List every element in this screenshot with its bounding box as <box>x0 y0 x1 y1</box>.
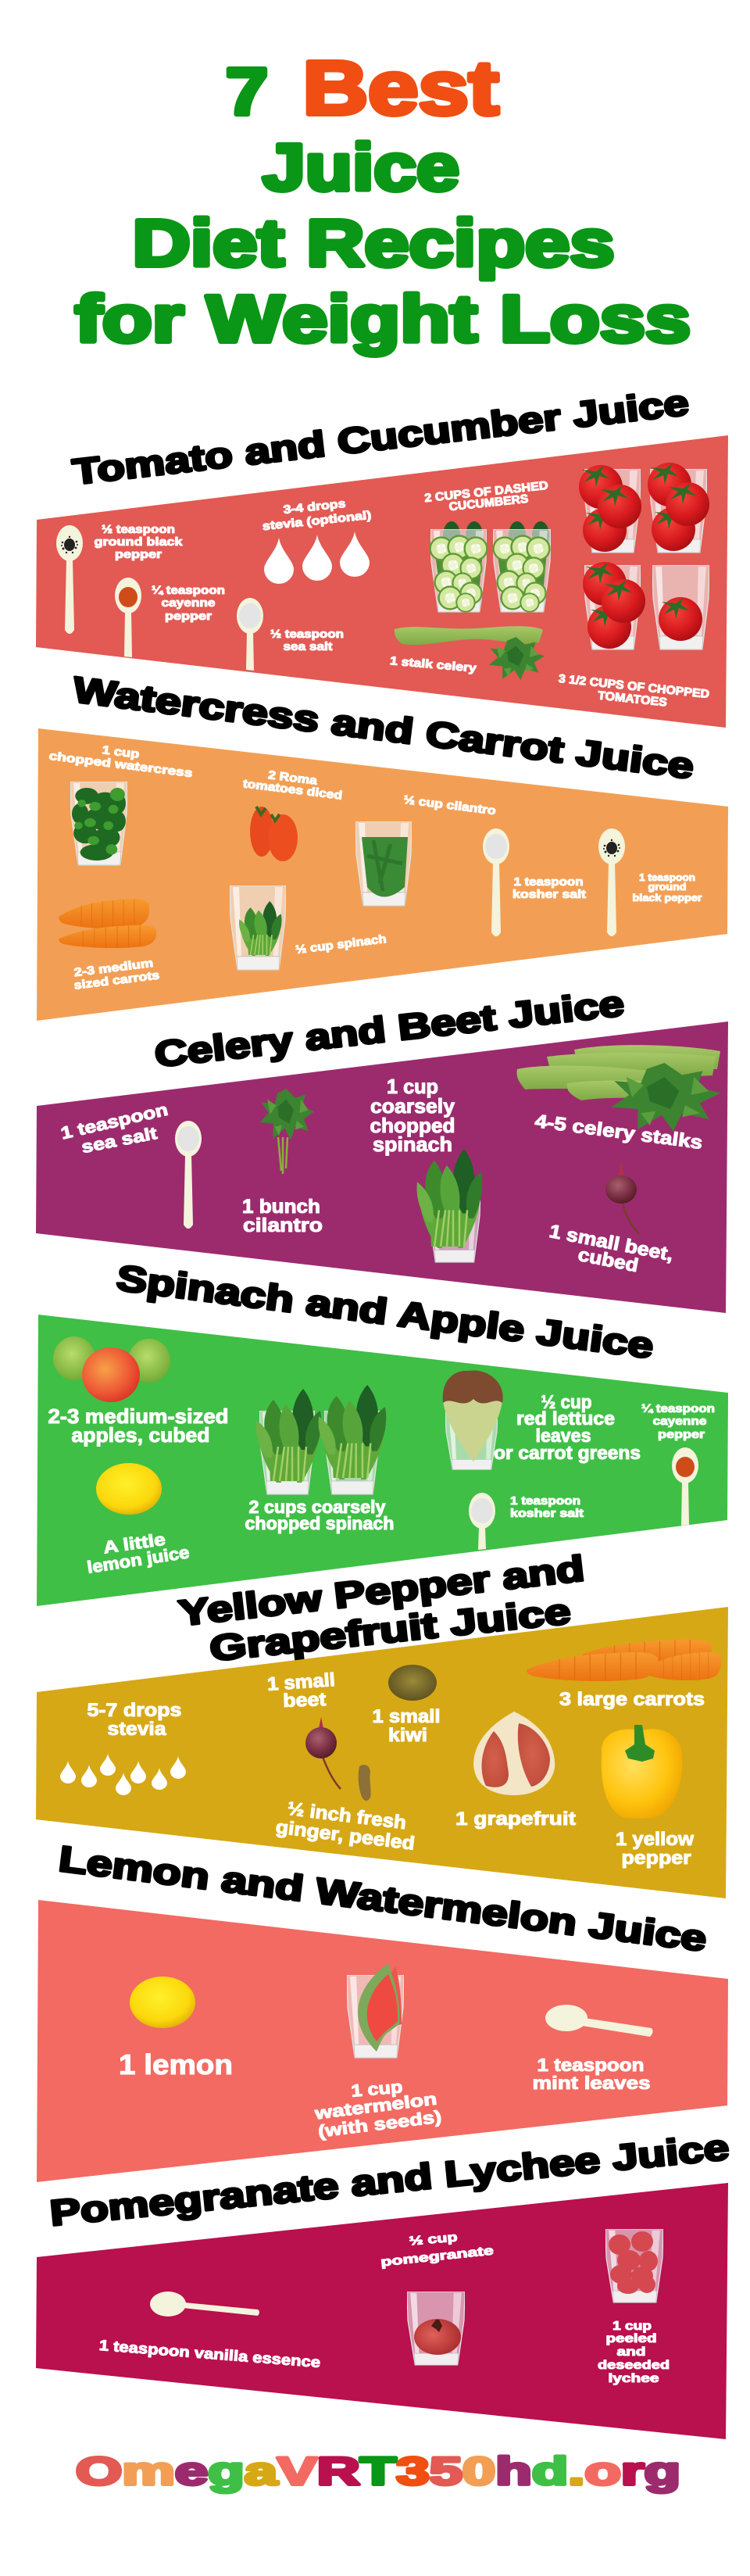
label: deseeded <box>598 2359 670 2372</box>
label: 2 cups coarsely <box>248 1497 386 1517</box>
panel: watercress and carrot juice <box>37 728 728 1021</box>
label: 2 CUPS OF DASHED <box>424 479 549 505</box>
label <box>633 871 702 903</box>
label <box>533 2055 650 2093</box>
title: Diet Recipes <box>133 206 614 280</box>
label: 1 teaspoon <box>538 2055 644 2075</box>
label: cilantro <box>243 1215 323 1236</box>
icon: stevia drops <box>60 1754 186 1795</box>
label: kosher salt <box>510 1507 584 1520</box>
icon: pomegranate glass <box>407 2292 465 2365</box>
label: ground black <box>94 535 183 549</box>
icon: black pepper spoon <box>56 525 83 634</box>
label: stevia <box>108 1719 166 1740</box>
heading: watercress and carrot: Watercress and Carrot Juice <box>71 669 696 786</box>
label: black pepper <box>633 892 702 903</box>
icon: beet <box>305 1717 341 1789</box>
label: CUCUMBERS <box>448 492 529 513</box>
label: ground <box>648 881 687 893</box>
icon: celery stalks <box>516 1045 720 1131</box>
label: pepper <box>622 1848 691 1869</box>
heading: pomegranate and lychee: Pomegranate and Lychee Juice <box>48 2127 730 2234</box>
label <box>270 628 344 653</box>
label <box>94 523 183 561</box>
panel: celery and beet juice <box>36 1021 728 1313</box>
label: 2-3 medium-sized <box>48 1404 228 1428</box>
label: 3 large carrots <box>559 1689 705 1710</box>
label: sized carrots <box>73 968 160 993</box>
icon: lemon <box>96 1463 162 1515</box>
title: Best <box>303 45 498 131</box>
icon: cayenne spoon <box>115 578 141 657</box>
label: 1 teaspoon <box>510 1494 580 1508</box>
icon: sea salt spoon <box>237 598 263 671</box>
label <box>424 479 549 513</box>
label: spinach <box>373 1132 452 1156</box>
icon: lemon <box>130 1977 195 2028</box>
label: ½ cup spinach <box>295 932 388 957</box>
panel: pomegranate and lychee juice <box>36 2183 728 2439</box>
icon: spinach glass <box>417 1149 482 1262</box>
icon: beet <box>605 1161 639 1234</box>
label: sea salt <box>80 1123 159 1157</box>
label: leaves <box>536 1426 591 1447</box>
panel: tomato and cucumber juice <box>36 435 728 728</box>
label <box>380 2231 495 2270</box>
title: Juice <box>262 131 459 204</box>
label: pomegranate <box>380 2244 495 2270</box>
label: kosher salt <box>512 888 586 901</box>
icon: cilantro bunch <box>260 1089 314 1174</box>
label: ¼ teaspoon <box>152 584 225 597</box>
icon: lychee glass <box>605 2229 663 2302</box>
label <box>152 584 225 623</box>
icon: teaspoon <box>545 2005 653 2037</box>
label: ½ cup <box>541 1392 592 1413</box>
label: cubed <box>577 1244 640 1276</box>
label: tomatoes diced <box>242 777 343 803</box>
label: red lettuce <box>516 1408 615 1429</box>
heading: yellow pepper and grapefruit: Grapefruit Juice <box>208 1590 573 1669</box>
label: 1 teaspoon <box>59 1100 170 1143</box>
icon: black pepper spoon <box>598 828 625 936</box>
icon: stevia drops <box>264 531 370 584</box>
label <box>548 1221 675 1276</box>
label: pepper <box>165 610 212 623</box>
label: 4-5 celery stalks <box>534 1111 704 1154</box>
title <box>75 45 691 356</box>
label <box>48 1404 228 1447</box>
label: mint leaves <box>533 2073 650 2093</box>
label: lychee <box>608 2372 659 2385</box>
heading: lemon and watermelon: Lemon and Watermelon Juice <box>56 1838 709 1959</box>
label <box>266 1669 336 1712</box>
label: chopped <box>370 1114 455 1137</box>
label: 1 grapefruit <box>455 1809 576 1830</box>
icon: spinach glass <box>230 886 286 970</box>
label: TOMATOES <box>597 689 668 710</box>
icon: sea salt spoon <box>175 1121 202 1229</box>
label: chopped spinach <box>245 1513 394 1533</box>
label: 1 cup <box>387 1075 438 1098</box>
label: or carrot greens <box>494 1443 641 1464</box>
label <box>59 1100 170 1157</box>
icon: spinach glasses <box>256 1385 386 1494</box>
icon: kiwi <box>388 1665 437 1701</box>
label <box>88 1700 181 1740</box>
label <box>512 875 586 901</box>
label <box>372 1706 441 1746</box>
icon: cayenne spoon <box>672 1447 698 1526</box>
label: 2 Roma <box>267 768 319 788</box>
label <box>274 1798 416 1855</box>
footer: website: O m e g a V R T 3 5 0 h d .o rg <box>76 2449 680 2493</box>
label: 1 yellow <box>616 1829 694 1850</box>
icon: cucumber glasses <box>430 521 551 612</box>
label: lemon juice <box>86 1542 191 1577</box>
label <box>245 1497 394 1533</box>
icon: grapefruit <box>473 1712 555 1795</box>
heading: spinach and apple: Spinach and Apple Juice <box>115 1257 656 1366</box>
label: 5-7 drops <box>88 1700 181 1721</box>
icon: kosher salt spoon <box>483 828 509 936</box>
label: 1 bunch <box>242 1196 320 1218</box>
icon: tomato glasses <box>579 463 709 649</box>
icon: watercress glass <box>70 782 127 865</box>
label: 1 lemon <box>119 2048 233 2080</box>
label: cayenne <box>653 1415 706 1428</box>
label: 1 cup <box>350 2077 403 2101</box>
label: chopped watercress <box>48 750 193 780</box>
label: A little <box>102 1530 166 1558</box>
label: coarsely <box>370 1094 455 1118</box>
label <box>242 768 343 803</box>
label: 1 teaspoon vanilla essence <box>98 2338 321 2371</box>
label: ½ teaspoon <box>270 628 344 641</box>
label: peeled <box>606 2332 656 2345</box>
label: ½ inch fresh <box>286 1798 407 1834</box>
icon: kosher salt spoon <box>469 1493 495 1550</box>
label: 2-3 medium <box>73 957 154 979</box>
label: 1 cup <box>612 2320 652 2333</box>
label: apples, cubed <box>72 1423 209 1447</box>
label <box>48 743 193 780</box>
icon: yellow pepper <box>602 1725 682 1819</box>
label: beet <box>283 1689 327 1712</box>
label <box>262 497 372 533</box>
label: 3 1/2 CUPS OF CHOPPED <box>558 672 710 701</box>
label <box>312 2077 443 2141</box>
label: stevia (optional) <box>262 509 372 533</box>
icon: carrots <box>527 1640 721 1681</box>
label <box>641 1402 715 1441</box>
label: pepper <box>658 1428 705 1441</box>
label <box>73 957 160 993</box>
heading: yellow pepper and grapefruit <box>177 1547 586 1669</box>
label: sea salt <box>283 640 333 653</box>
icon: celery stalk <box>395 626 545 680</box>
panel: lemon and watermelon juice <box>37 1900 728 2182</box>
label: (with seeds) <box>317 2106 443 2141</box>
label: cayenne <box>161 596 216 610</box>
label: kiwi <box>388 1725 427 1746</box>
label: 1 stalk celery <box>389 654 477 675</box>
icon: red lettuce glass <box>443 1370 503 1469</box>
label: 1 cup <box>102 743 140 761</box>
label: and <box>617 2345 645 2359</box>
icon: ginger <box>359 1765 371 1801</box>
label: pepper <box>115 548 162 561</box>
icon: cilantro glass <box>355 821 412 906</box>
label: watermelon <box>312 2089 438 2123</box>
label: 1 small <box>266 1669 336 1695</box>
label <box>510 1494 584 1520</box>
title: 7 <box>226 55 268 128</box>
heading: celery and beet: Celery and Beet Juice <box>152 982 626 1075</box>
label: 1 small beet, <box>548 1221 675 1265</box>
label: ½ teaspoon <box>102 523 175 536</box>
label: 3-4 drops <box>283 497 346 517</box>
label <box>616 1829 694 1869</box>
icon: apples <box>53 1336 170 1402</box>
icon: watermelon glass <box>347 1963 404 2058</box>
panel: spinach and apple juice <box>37 1315 728 1606</box>
label <box>370 1075 455 1156</box>
label <box>494 1392 641 1464</box>
panel: yellow pepper and grapefruit juice <box>36 1607 728 1898</box>
label <box>242 1196 323 1236</box>
icon: teaspoon <box>150 2292 259 2317</box>
label: ginger, peeled <box>274 1816 416 1855</box>
icon: roma tomatoes <box>250 807 298 861</box>
label: ½ cup <box>409 2231 459 2249</box>
label: 1 teaspoon <box>514 875 583 889</box>
icon: carrots <box>59 899 156 948</box>
label: ¼ teaspoon <box>641 1402 715 1415</box>
label <box>86 1530 191 1577</box>
heading: yellow pepper and grapefruit: Yellow Pepper and <box>177 1547 586 1633</box>
title: for Weight Loss <box>75 282 691 356</box>
label: ½ cup cilantro <box>402 793 497 818</box>
label <box>598 2320 670 2385</box>
label: 1 teaspoon <box>639 871 695 883</box>
heading: tomato and cucumber: Tomato and Cucumber Juice <box>70 381 691 492</box>
label: 1 small <box>372 1706 441 1727</box>
